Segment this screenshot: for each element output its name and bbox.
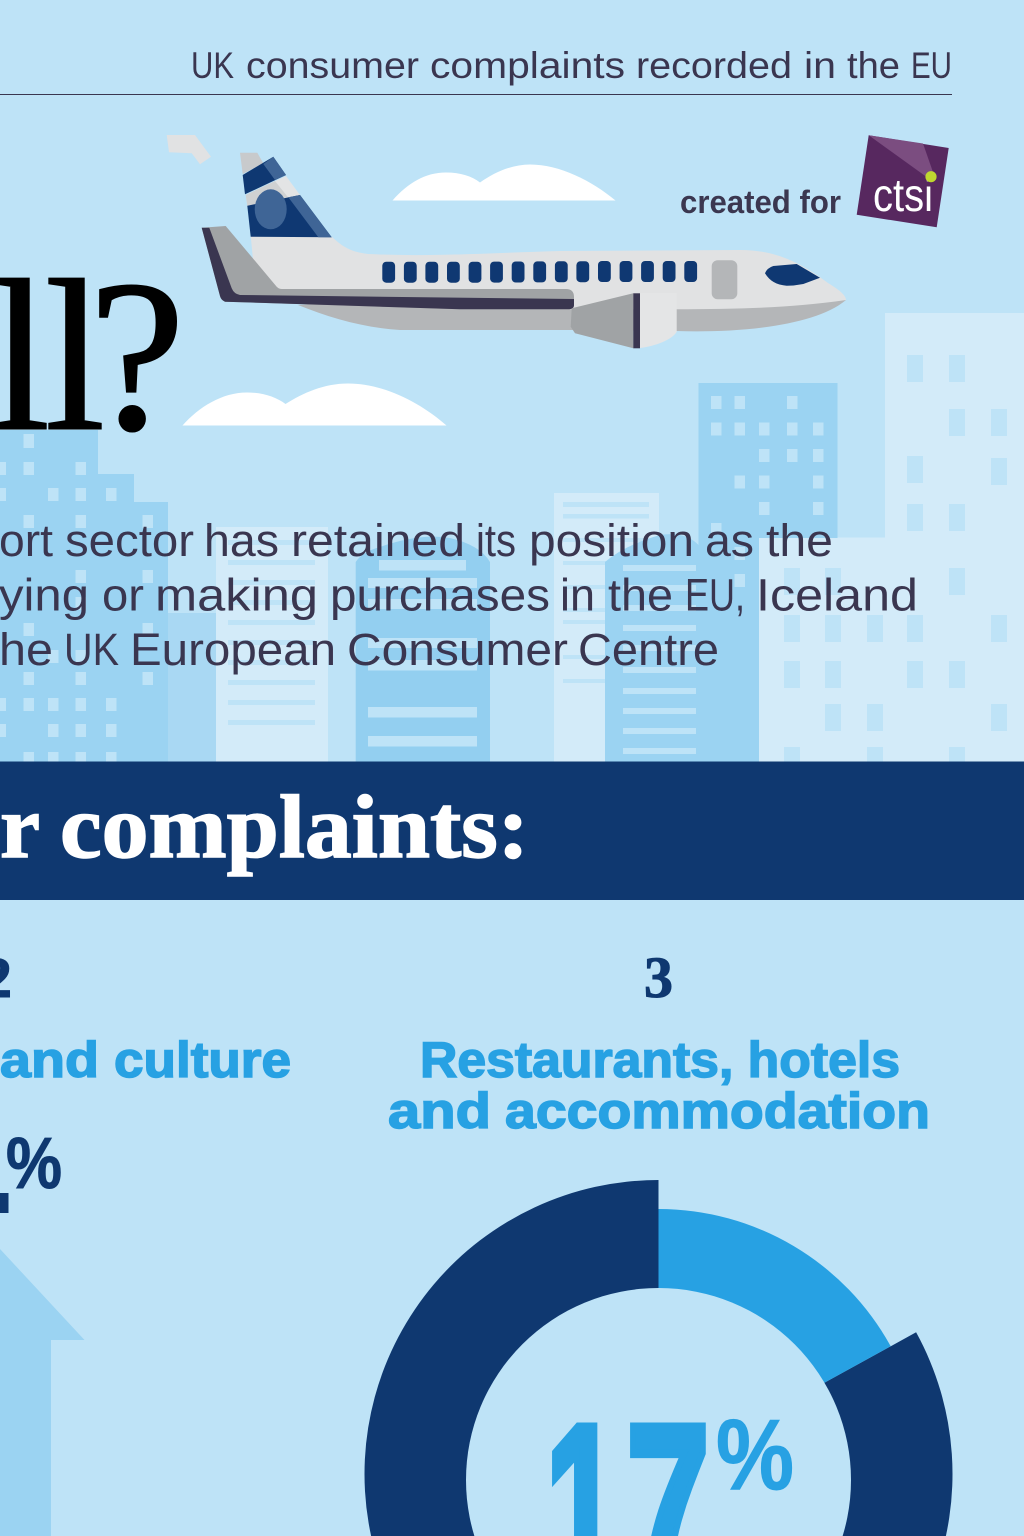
building: pale block with lines: [216, 527, 328, 762]
intro paragraph: sector: [65, 515, 194, 566]
intro paragraph: the: [608, 570, 673, 620]
intro paragraph: Consumer: [347, 624, 568, 675]
complaint 3: rank number: 3: [644, 945, 673, 1010]
complaint 3: category label: Restaurants, hotels: [420, 1032, 900, 1088]
navy heading band: r: [0, 778, 40, 877]
cabin windows: [382, 261, 697, 283]
intro paragraph: UK: [64, 624, 119, 675]
header line text: consumer: [246, 45, 419, 86]
building: left stepped tower: [0, 430, 216, 762]
intro paragraph: ort: [0, 515, 53, 566]
intro paragraph: Iceland: [756, 570, 918, 620]
wing root: [640, 293, 677, 348]
building: far right pale tower: [759, 313, 1024, 762]
header line text: the: [847, 45, 900, 86]
complaint 3: category label: [388, 1032, 930, 1139]
rear stabiliser wing: [202, 226, 574, 309]
complaint 2: category label: culture: [114, 1032, 291, 1088]
skyline illustration: [0, 313, 1024, 762]
intro paragraph: in: [560, 570, 595, 620]
intro paragraph: making: [155, 570, 318, 620]
complaint 3: donut chart: [365, 1180, 953, 1536]
lower fuselage shadow: [298, 290, 846, 331]
door: [712, 260, 737, 299]
complaint 2: category label: [0, 1032, 291, 1088]
detached grey tail fragment: [167, 135, 211, 164]
intro paragraph: European: [130, 624, 336, 675]
navy heading band: complaints:: [60, 778, 529, 877]
intro paragraph: or: [102, 570, 144, 620]
intro paragraph: Centre: [578, 624, 719, 675]
intro paragraph: EU,: [685, 570, 745, 620]
navy heading band: [0, 762, 1024, 900]
complaint 3: category label: accommodation: [505, 1083, 930, 1139]
intro paragraph: has: [204, 515, 279, 566]
intro paragraph: the: [766, 515, 833, 566]
intro paragraph: its: [476, 515, 516, 566]
building: pale tall block: [554, 493, 659, 762]
engine: [571, 293, 640, 348]
header line text: UK: [191, 45, 234, 86]
intro paragraph: position: [529, 515, 694, 566]
intro paragraph: ying: [0, 570, 89, 620]
header line text: recorded: [636, 45, 792, 86]
cloud: lower: [182, 384, 446, 426]
header line text: EU: [911, 45, 952, 86]
building: arched blue block: [356, 537, 490, 762]
created for label: created for: [680, 184, 841, 220]
complaint 2: percentage: %: [6, 1124, 62, 1204]
building: front blue block and centre-right tower: [605, 383, 838, 762]
donut value: %: [716, 1399, 794, 1511]
intro paragraph: he: [0, 624, 53, 675]
complaint 2: category label: and: [0, 1032, 99, 1088]
header line text: in: [804, 45, 836, 86]
header line text: [191, 45, 952, 86]
header line text: complaints: [430, 45, 625, 86]
intro paragraph: [0, 515, 918, 675]
intro paragraph: retained: [291, 515, 465, 566]
ctsi logo: [857, 135, 949, 227]
donut value: [546, 1376, 794, 1536]
tail fin: [240, 153, 332, 237]
complaint 3: category label: and: [388, 1083, 491, 1139]
main fuselage: [251, 236, 846, 309]
intro paragraph: purchases: [330, 570, 550, 620]
cockpit window: [765, 264, 820, 286]
complaint 2: arrow: [0, 1249, 84, 1536]
airplane: [167, 135, 846, 348]
cloud: upper: [392, 164, 616, 200]
ctsi logo: ctsi: [873, 169, 933, 221]
intro paragraph: as: [705, 515, 754, 566]
